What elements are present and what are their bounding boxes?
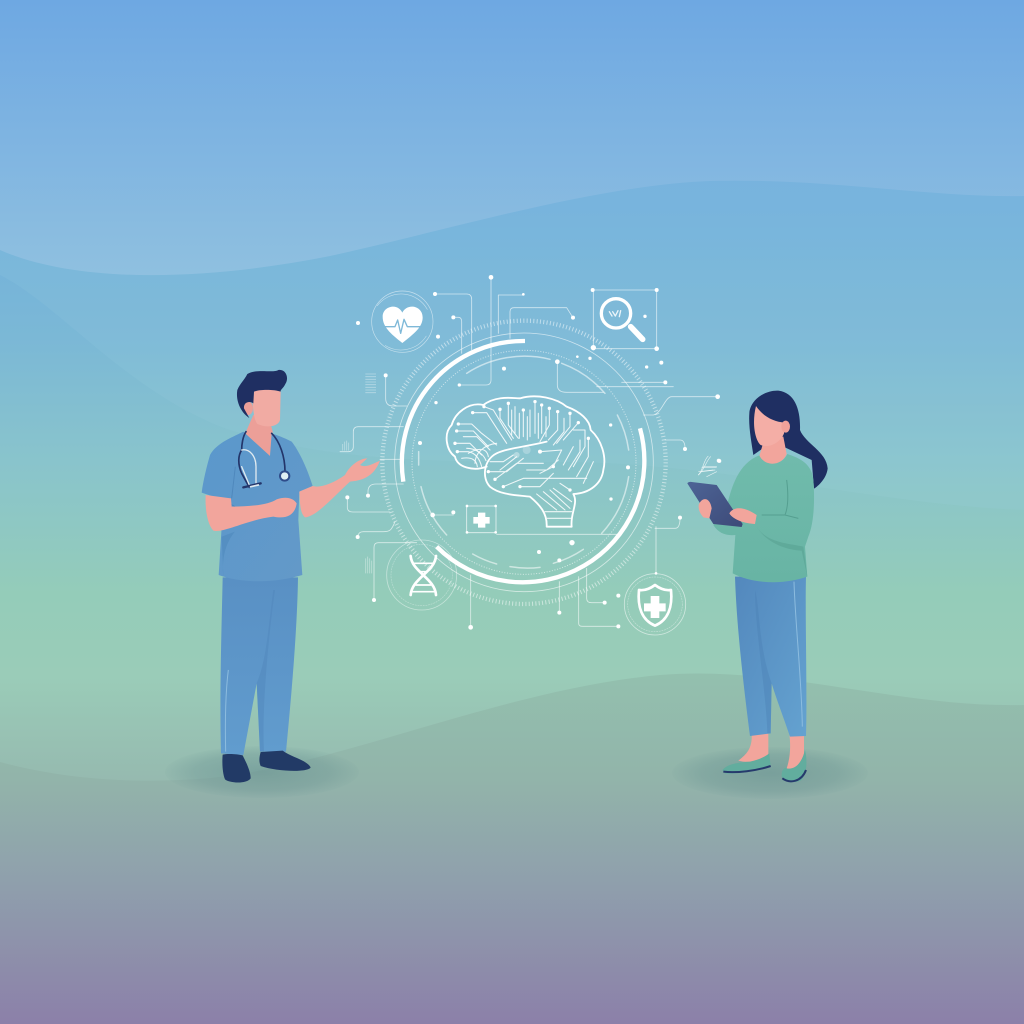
floor shadow: patient xyxy=(672,747,868,799)
brain circuit traces xyxy=(455,402,593,518)
background wave: mid band xyxy=(0,0,1024,510)
doctor face xyxy=(253,390,281,426)
doctor neck xyxy=(245,415,273,456)
doctor arm: folded xyxy=(206,495,297,531)
floating glyph xyxy=(698,456,721,475)
patient jeans xyxy=(735,577,806,737)
icon: heart monitor xyxy=(372,291,433,353)
patient hands xyxy=(699,499,757,524)
patient face xyxy=(754,406,785,446)
figure: patient xyxy=(687,391,828,782)
brain outline xyxy=(447,396,604,527)
patient neck xyxy=(759,437,787,464)
small floating glyphs xyxy=(698,457,720,477)
inner dashed arcs xyxy=(419,356,629,568)
brain circuit nodes xyxy=(453,400,590,492)
holographic brain interface xyxy=(340,275,720,635)
patient sweater xyxy=(713,454,814,582)
icon: shield with cross xyxy=(624,574,686,635)
background wave: ground xyxy=(0,673,1024,1024)
outer tick ring xyxy=(382,321,666,604)
patient shoes xyxy=(722,753,771,773)
doctor trousers xyxy=(220,577,298,755)
doctor hair xyxy=(237,370,287,418)
small data bars xyxy=(343,374,376,573)
doctor shoes xyxy=(222,754,251,782)
tablet xyxy=(687,482,743,527)
circuit connector lines xyxy=(340,277,718,627)
thick arcs xyxy=(402,341,644,582)
icon: DNA helix xyxy=(387,540,457,610)
patient long hair xyxy=(749,391,828,489)
icon: magnifying glass xyxy=(601,299,643,339)
patient legs xyxy=(738,733,804,769)
background wave: sky xyxy=(0,0,1024,275)
floor shadow: doctor xyxy=(165,746,359,798)
doctor arm: gesturing xyxy=(299,458,380,517)
figure: doctor xyxy=(202,370,380,782)
doctor scrub top xyxy=(202,432,313,581)
connector nodes xyxy=(345,275,720,630)
icon: medical cross box xyxy=(466,505,497,534)
stethoscope xyxy=(239,432,289,487)
